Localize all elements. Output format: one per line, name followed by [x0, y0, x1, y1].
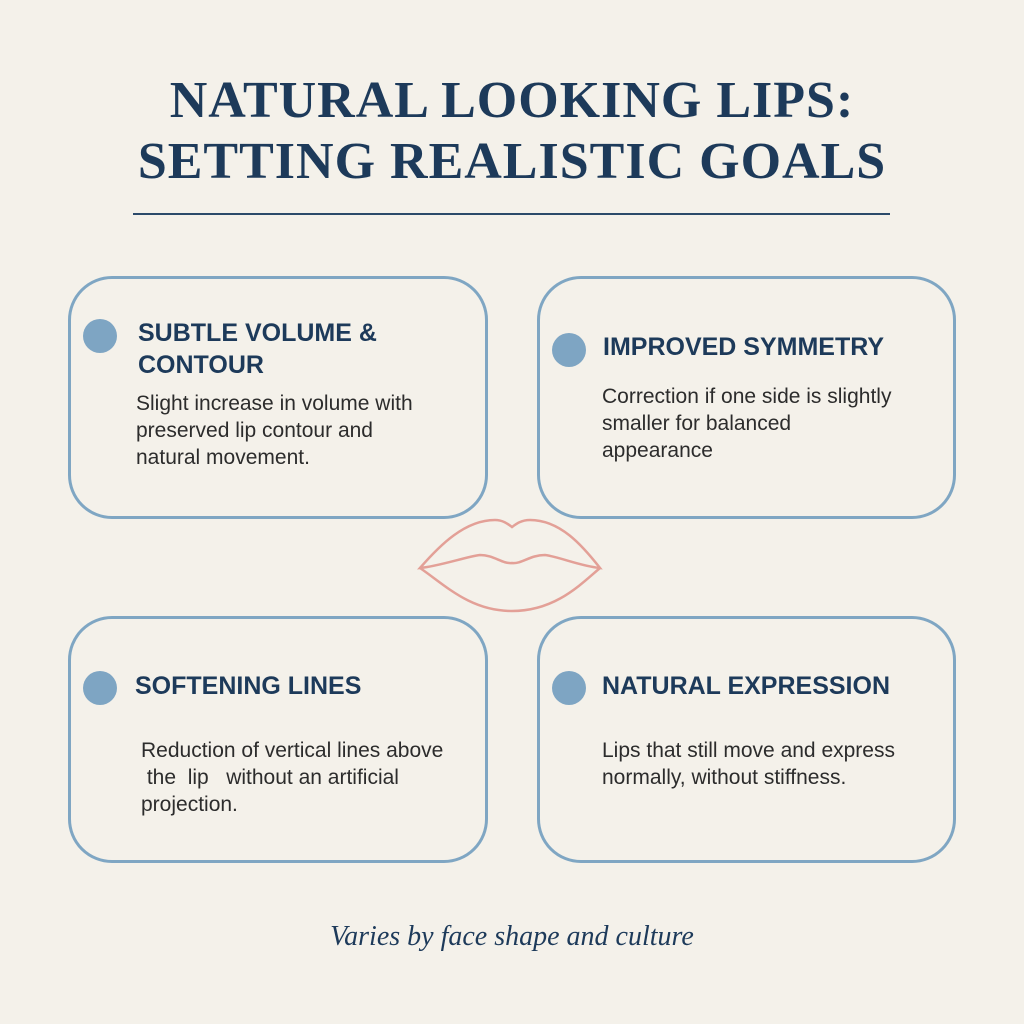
text: [602, 739, 895, 789]
text: [136, 392, 413, 469]
text: [602, 385, 892, 462]
text: [141, 739, 443, 816]
heading: SUBTLE VOLUME &: [138, 319, 377, 347]
panel: symmetry: [537, 276, 956, 519]
title: SETTING REALISTIC GOALS: [138, 133, 886, 190]
title: [138, 72, 886, 190]
text: Slight increase in volume with: [136, 392, 413, 415]
icon: dot: [552, 333, 586, 367]
icon: dot: [83, 671, 117, 705]
footer note: Varies by face shape and culture: [330, 921, 694, 952]
text: the lip without an artificial: [147, 766, 399, 789]
text: Lips that still move and express: [602, 739, 895, 762]
text: Reduction of vertical lines above: [141, 739, 443, 762]
text: natural movement.: [136, 446, 310, 469]
icon: lips: [417, 518, 603, 612]
heading: SOFTENING LINES: [135, 672, 361, 700]
heading: NATURAL EXPRESSION: [602, 672, 890, 700]
icon: dot: [552, 671, 586, 705]
panel: natural expression: [537, 616, 956, 863]
title: NATURAL LOOKING LIPS:: [170, 72, 854, 129]
text: Correction if one side is slightly: [602, 385, 891, 408]
text: projection.: [141, 793, 238, 816]
heading: [138, 319, 377, 379]
text: preserved lip contour and: [136, 419, 373, 442]
text: smaller for balanced: [602, 412, 791, 435]
text: appearance: [602, 439, 713, 462]
heading: CONTOUR: [138, 351, 264, 379]
panel: subtle volume: [68, 276, 488, 519]
text: normally, without stiffness.: [602, 766, 846, 789]
heading: IMPROVED SYMMETRY: [603, 333, 884, 361]
panel: softening lines: [68, 616, 488, 863]
icon: dot: [83, 319, 117, 353]
